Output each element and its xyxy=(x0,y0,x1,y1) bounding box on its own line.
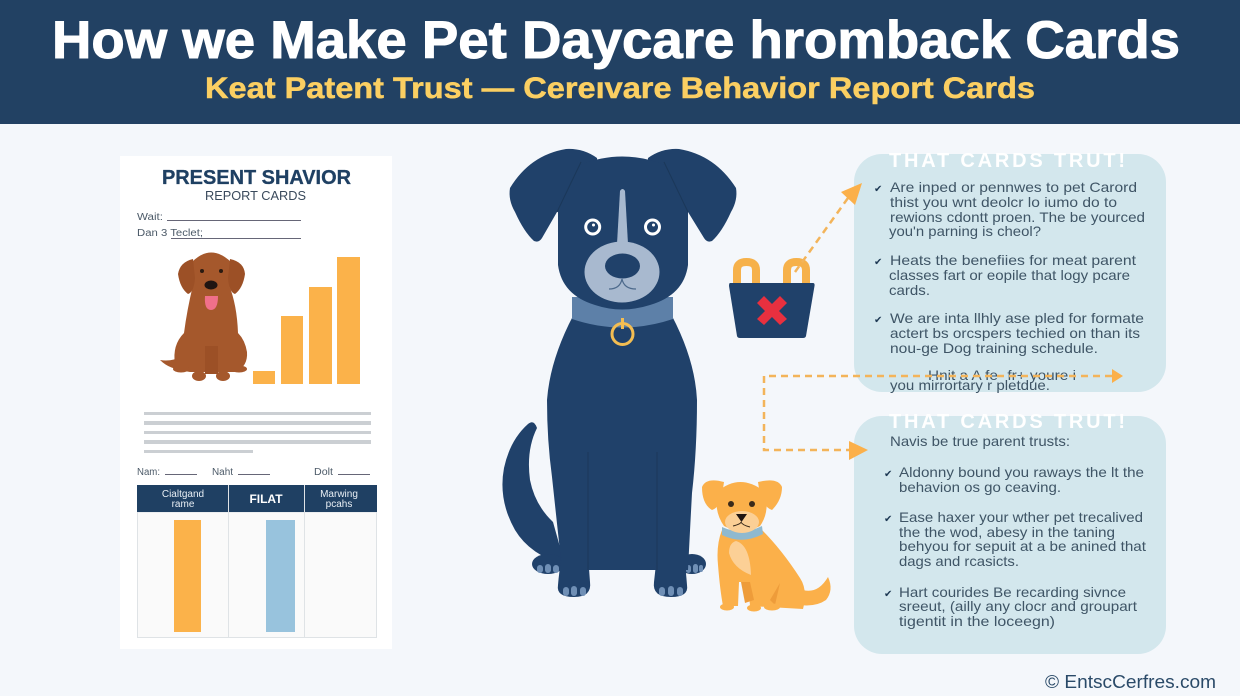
checklist: cards. xyxy=(889,282,930,298)
checklist: Ease haxer your wther pet trecalived xyxy=(899,509,1143,525)
form fields xyxy=(137,212,301,239)
checklist: tigentit in the loceegn) xyxy=(899,613,1055,629)
blaze and muzzle xyxy=(617,189,628,244)
checklist: dags and rcasicts. xyxy=(899,553,1019,569)
puppy head xyxy=(716,482,767,531)
header banner xyxy=(0,0,1240,124)
ears xyxy=(510,149,600,242)
checklist: ✔ xyxy=(874,315,882,326)
checklist: ✔ xyxy=(874,184,882,195)
panel heading: THAT CARDS TRUT! xyxy=(889,411,1125,433)
back paws xyxy=(532,554,564,574)
title: How we Make Pet Daycare hromback Cards xyxy=(52,11,1180,70)
checklist: actert bs orcspers techied on than its xyxy=(890,325,1140,341)
table xyxy=(137,485,377,638)
table: FILAT xyxy=(249,492,283,506)
checklist xyxy=(884,433,1146,629)
checklist: sreeut, (ailly any clocr and groupart xyxy=(899,598,1137,614)
icon: big navy dog xyxy=(502,149,736,597)
checklist: Hart courides Be recarding sivnce xyxy=(899,584,1126,600)
checklist xyxy=(874,179,1145,393)
checklist: ✔ xyxy=(884,469,892,480)
tail xyxy=(502,422,565,565)
signature row: Naht xyxy=(212,467,233,478)
checklist: ✔ xyxy=(874,257,882,268)
panel: cards trust bottom xyxy=(854,411,1166,654)
card heading: PRESENT SHAVIOR xyxy=(162,167,352,189)
checklist: ✔ xyxy=(884,514,892,525)
form fields: Dan 3 Teclet; xyxy=(137,228,203,239)
checklist: Hnit a A fe- fr+ youre i xyxy=(928,367,1076,383)
arrow: bag to top panel xyxy=(795,183,862,272)
checklist: you mirrortary r pletdue. xyxy=(890,377,1050,393)
checklist: Heats the benefiies for meat parent xyxy=(890,252,1136,268)
panel heading: THAT CARDS TRUT! xyxy=(889,150,1125,172)
checklist: ✔ xyxy=(884,589,892,600)
icon: bag with red x xyxy=(729,262,815,338)
body xyxy=(547,316,697,570)
checklist: rewions cdontt proen. The be yourced xyxy=(890,209,1145,225)
table: rame xyxy=(172,499,195,510)
puppy collar xyxy=(722,526,763,540)
checklist: Aldonny bound you raways the lt the xyxy=(899,464,1144,480)
footer credit: © EntscCerfres.com xyxy=(1045,672,1216,692)
checklist: Are inped or pennwes to pet Carord xyxy=(890,179,1137,195)
checklist: Navis be true parent trusts: xyxy=(890,433,1070,449)
checklist: the the wod, abesy in the taning xyxy=(899,524,1115,540)
panel: cards trust top xyxy=(854,150,1166,393)
collar xyxy=(572,297,673,328)
checklist: nou-ge Dog training schedule. xyxy=(890,340,1098,356)
arrow: connector between panels xyxy=(764,369,1123,460)
collar ring xyxy=(612,324,633,344)
signature row: Nam: xyxy=(137,467,160,478)
checklist: We are inta llhly ase pled for formate xyxy=(890,310,1144,326)
checklist: you'n parning is cheol? xyxy=(889,223,1041,239)
panel: report card xyxy=(120,156,392,649)
front paws xyxy=(558,555,590,597)
eyes xyxy=(584,218,601,236)
card subheading: REPORT CARDS xyxy=(205,188,306,203)
head xyxy=(558,156,688,310)
bar chart: orange xyxy=(253,257,360,384)
signature row xyxy=(137,467,370,478)
table: pcahs xyxy=(326,499,352,510)
subtitle: Keat Patent Trust — Cereıvare Behavior Report Cards xyxy=(205,72,1035,105)
nose xyxy=(605,254,640,278)
signature row: Dolt xyxy=(314,467,333,478)
table: Marwing xyxy=(320,489,358,500)
checklist: behavion os go ceaving. xyxy=(899,479,1061,495)
form fields: Wait: xyxy=(137,212,163,223)
table: Cialtgand xyxy=(162,489,204,500)
checklist: behyou for sepuit at a be anined that xyxy=(899,538,1146,554)
text placeholder lines xyxy=(144,412,371,453)
checklist: classes fart or eopile that logy pcare xyxy=(889,267,1130,283)
icon: brown dog xyxy=(160,252,247,381)
checklist: thist you wnt deolcr lo iumo do to xyxy=(890,194,1117,210)
icon: small orange puppy xyxy=(702,480,831,612)
